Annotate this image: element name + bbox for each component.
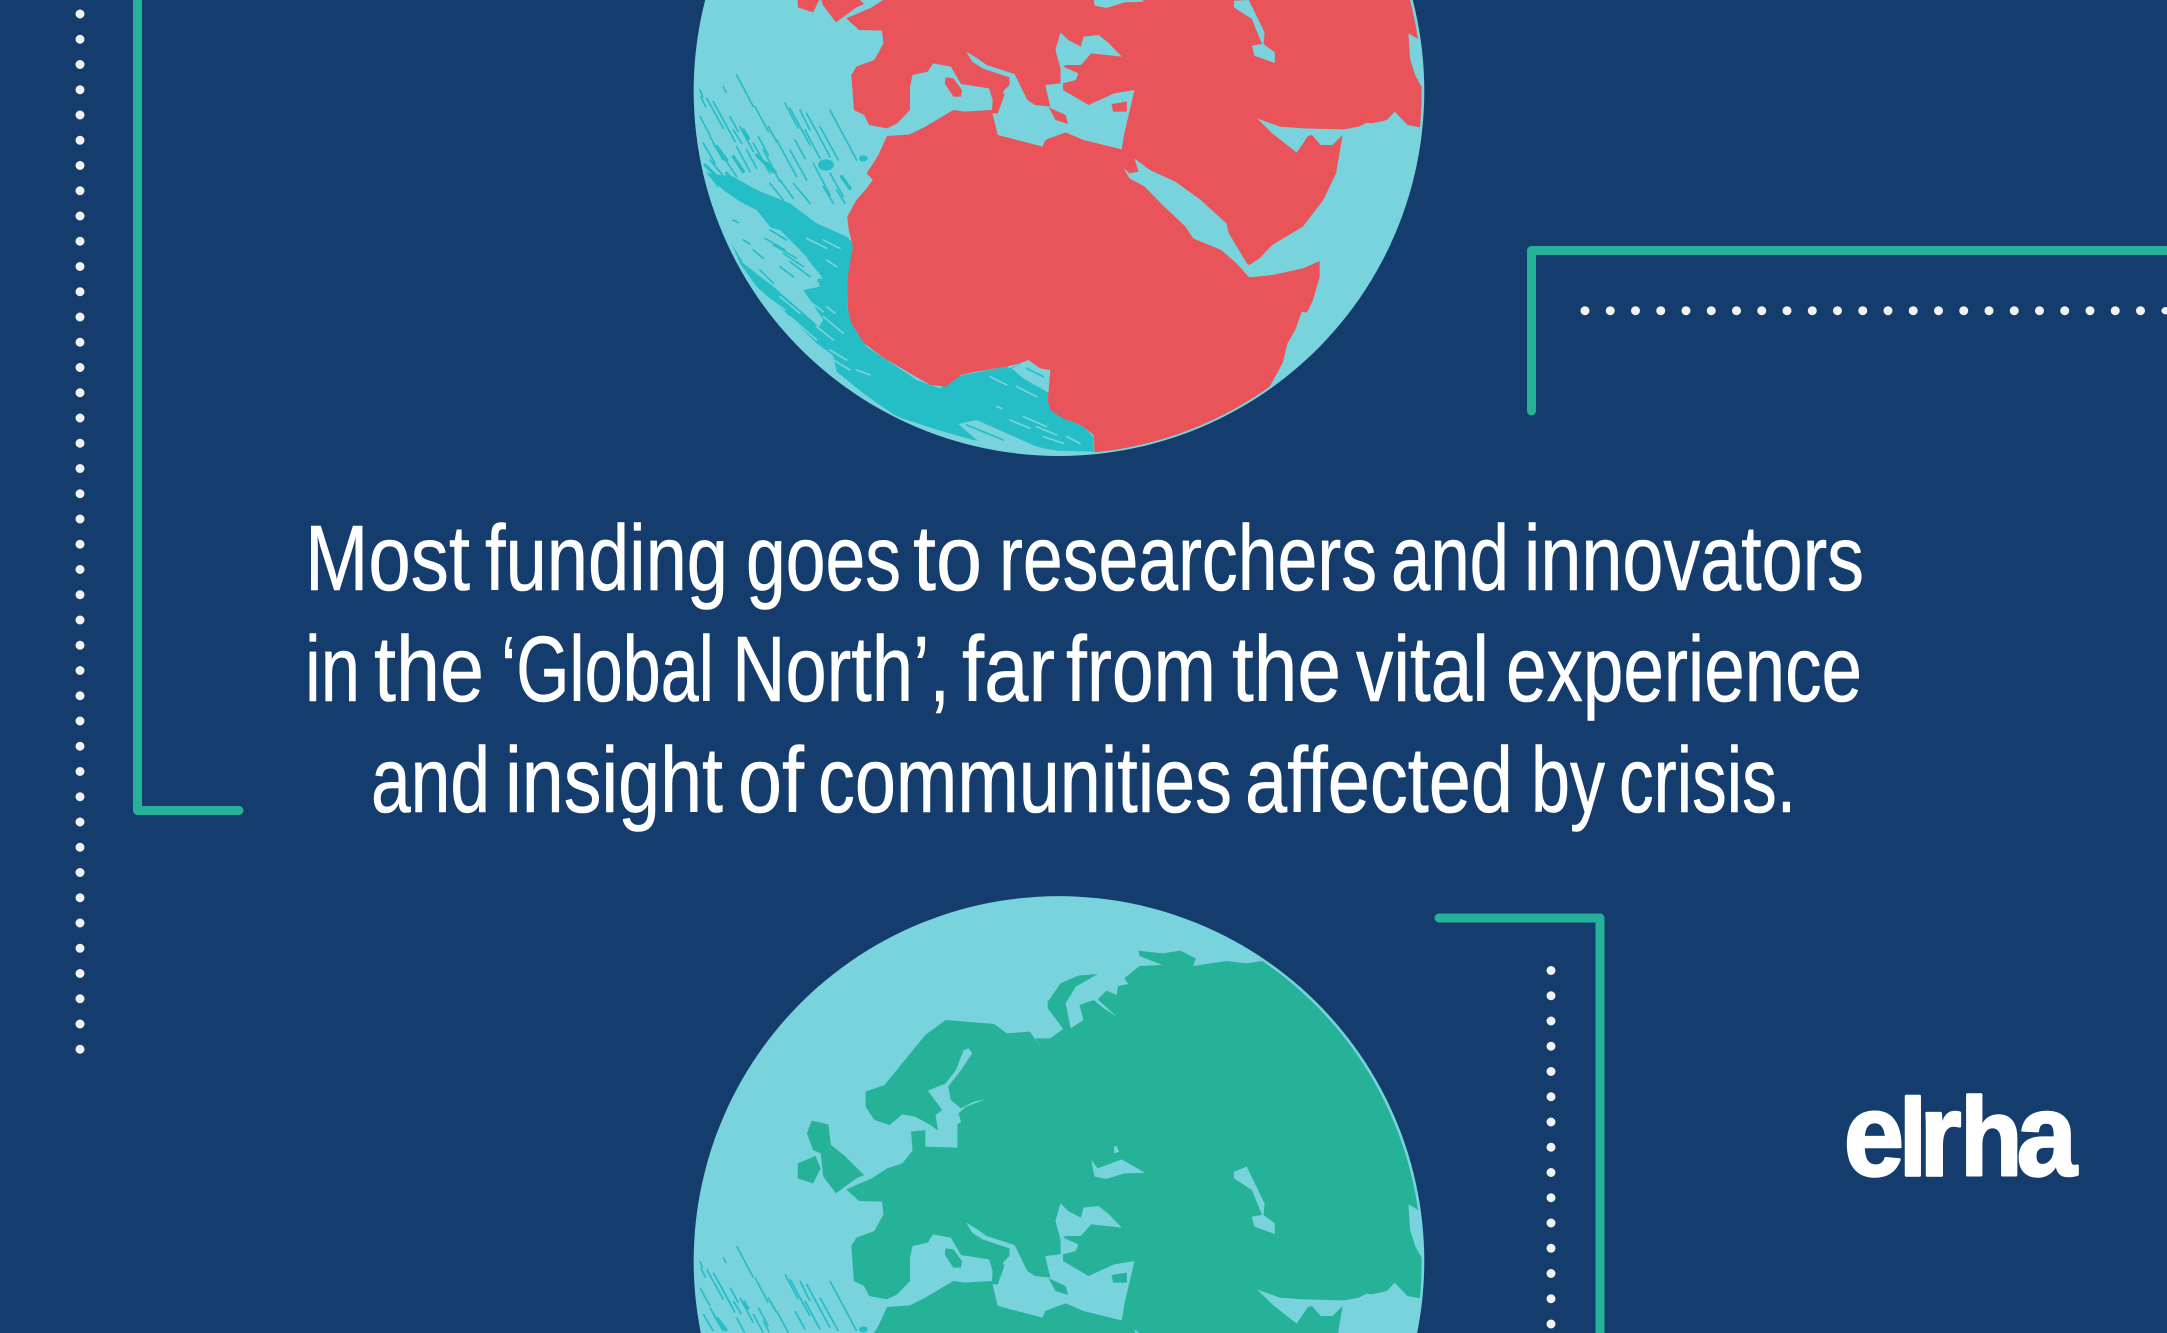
ocean texture (700, 1246, 868, 1333)
dotted line: top right row (1585, 307, 2167, 314)
logo: elrha: l (1899, 1077, 1927, 1200)
headline text (305, 506, 1864, 832)
land: Europe, Africa, Asia (798, 0, 1456, 455)
ocean texture (700, 75, 1094, 452)
headline text: the (374, 617, 484, 721)
logo: elrha: a (2017, 1070, 2078, 1202)
dotted line: bottom right column (1546, 970, 1556, 1325)
clipped ocean texture and land (700, 0, 1456, 455)
logo: elrha: e (1844, 1070, 1904, 1202)
clipped ocean texture and land (700, 951, 1456, 1333)
headline text: innovators (1524, 506, 1864, 610)
headline text: goes (746, 506, 901, 610)
headline text: from (1066, 617, 1216, 721)
headline text: researchers (999, 506, 1377, 610)
logo: elrha: r (1919, 1070, 1962, 1202)
headline text: insight (505, 728, 723, 832)
ocean disc (694, 0, 1424, 456)
headline text: in (305, 617, 360, 721)
headline text: North’, (732, 617, 950, 721)
globe: bottom, green landmasses (694, 896, 1456, 1333)
headline text: of (738, 728, 804, 832)
headline text: and (1391, 506, 1509, 610)
bracket: left vertical and foot (138, 0, 244, 815)
headline text: far (962, 617, 1055, 721)
headline text: crisis. (1619, 728, 1796, 832)
headline text: and (371, 728, 490, 832)
headline text: ‘Global (501, 617, 714, 721)
headline text: Most (305, 506, 470, 610)
headline text: experience (1506, 617, 1862, 721)
bracket: top right (1527, 250, 2167, 416)
inland seas (1091, 1146, 1275, 1234)
headline text: affected (1245, 728, 1513, 832)
logo: elrha: h (1960, 1075, 2023, 1200)
land: Europe and northern Asia (798, 951, 1456, 1333)
bracket: bottom right (1434, 914, 1600, 1333)
headline text: vital (1356, 617, 1489, 721)
headline text: to (913, 506, 982, 610)
headline text: funding (485, 506, 728, 610)
inland seas (1094, 0, 1275, 63)
ocean disc (694, 896, 1424, 1333)
headline text: communities (818, 728, 1232, 832)
dotted line: left column (76, 14, 84, 1052)
headline text: by (1531, 728, 1605, 832)
globe: top, red landmasses (694, 0, 1456, 456)
headline text: the (1232, 617, 1341, 721)
